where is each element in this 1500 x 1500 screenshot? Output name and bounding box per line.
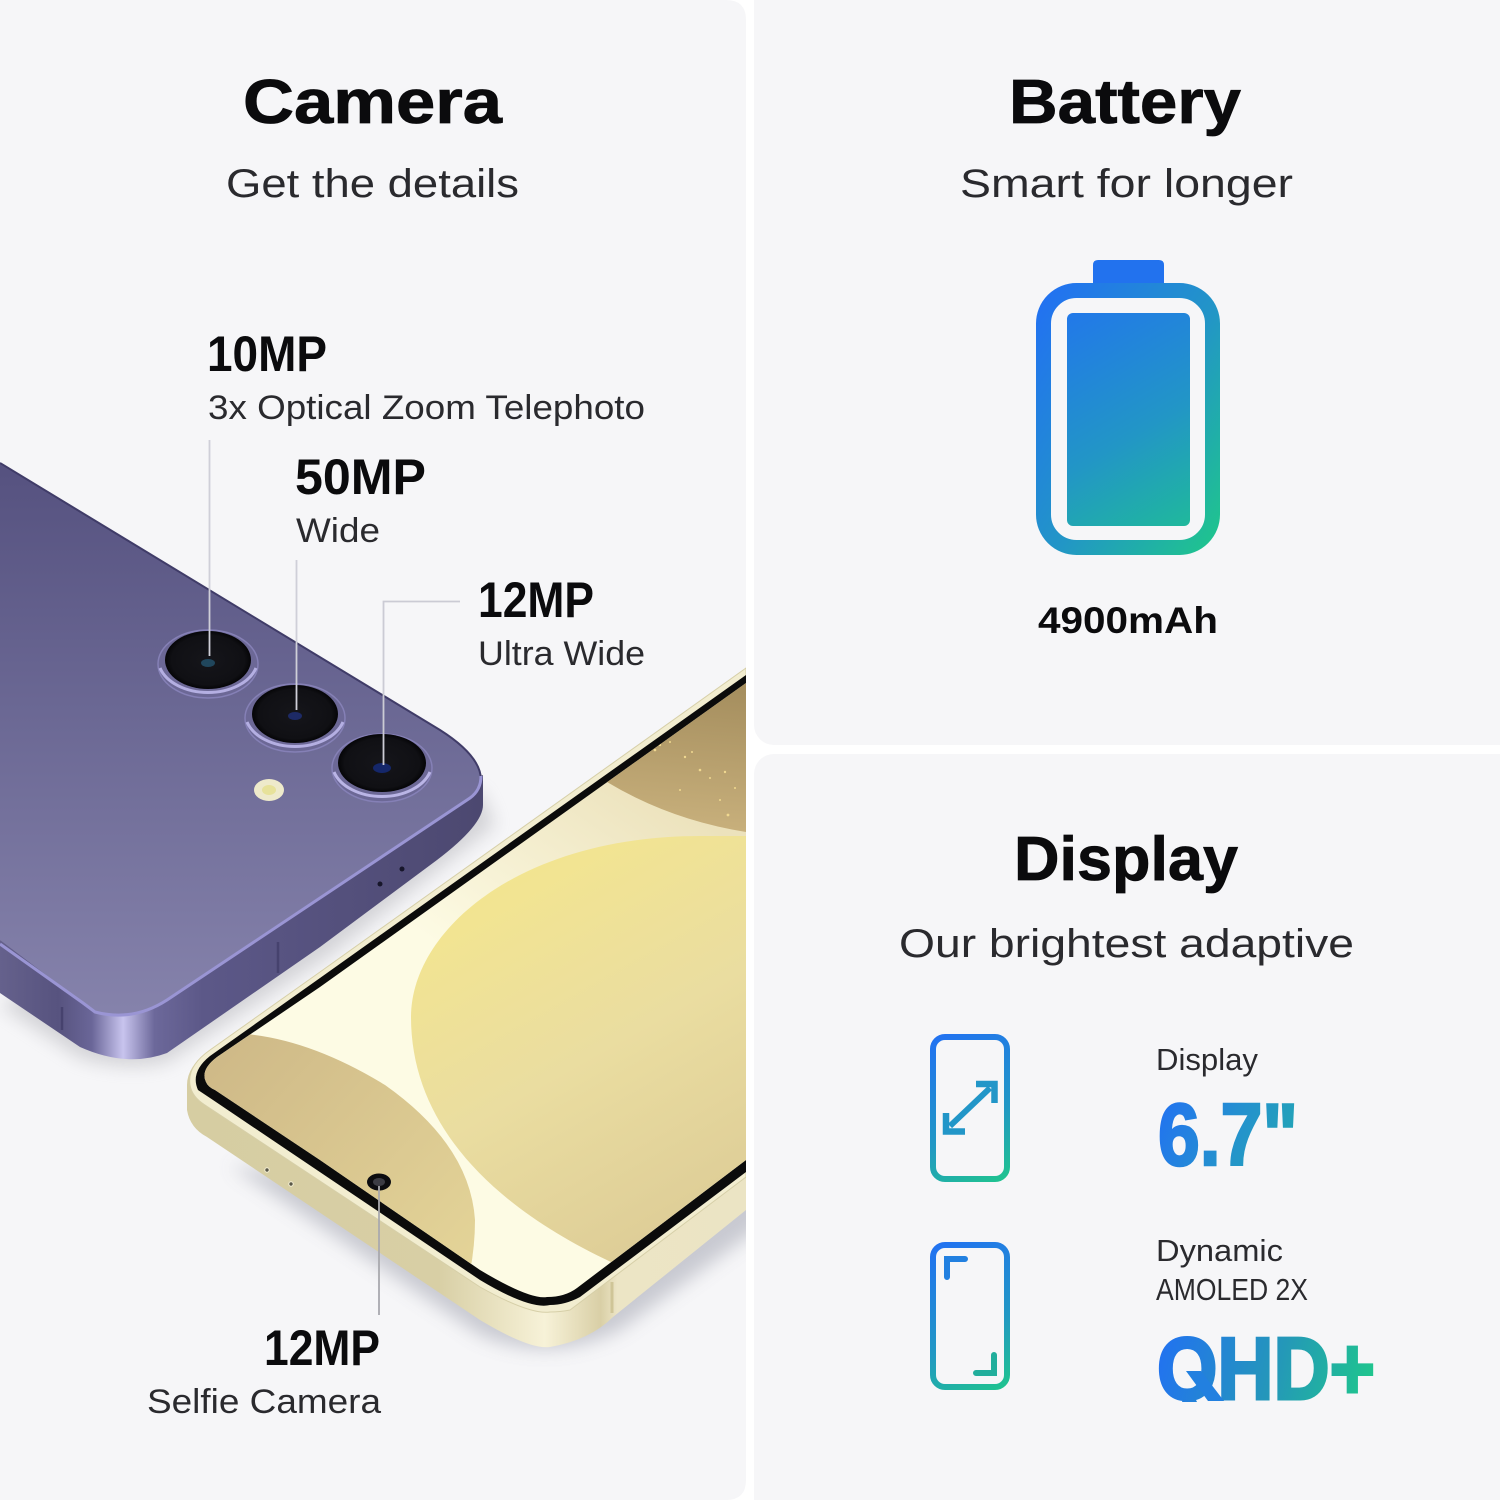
camera flash [254, 779, 284, 801]
earpiece holes [265, 1168, 293, 1186]
display subheading: Our brightest adaptive [899, 922, 1354, 966]
battery capacity: 4900mAh [1038, 600, 1218, 641]
label: 12MP selfie camera: 12MP [264, 1320, 380, 1376]
value: 6.7 inches: 6.7" [1158, 1085, 1298, 1184]
label: display size: Display [1156, 1042, 1258, 1077]
label: panel type: Dynamic [1156, 1233, 1283, 1268]
label: 12MP ultra wide [478, 572, 645, 673]
label: 12MP selfie camera: Selfie Camera [147, 1383, 381, 1421]
icon: phone with corner brackets [933, 1245, 1007, 1387]
label: 10MP telephoto: 10MP [207, 326, 327, 382]
label: 12MP ultra wide: Ultra Wide [478, 635, 645, 673]
icon: battery [1044, 260, 1212, 548]
callout line: 10MP [208, 440, 210, 656]
camera heading: Camera [243, 68, 503, 137]
label: 12MP ultra wide: 12MP [478, 572, 594, 628]
illustration: yellow phone front [180, 660, 770, 1349]
front camera [367, 1174, 391, 1190]
battery subheading: Smart for longer [960, 162, 1293, 206]
wallpaper: top tan shape [607, 683, 746, 832]
label: 50MP wide: Wide [296, 512, 380, 550]
label: panel type: AMOLED 2X [1156, 1272, 1308, 1307]
microphone holes [378, 866, 404, 886]
lens: 12MP ultra wide [332, 734, 432, 802]
lens: 50MP wide [245, 684, 345, 752]
display heading: Display [1014, 825, 1239, 894]
callout line: 12MP selfie [378, 1186, 380, 1315]
icon: phone with diagonal arrow [933, 1037, 1007, 1179]
panel: display [754, 754, 1500, 1500]
label: 10MP telephoto [207, 326, 645, 427]
callout line: 50MP [296, 560, 298, 710]
wallpaper: sparkles [654, 741, 736, 816]
label: 50MP wide: 50MP [295, 449, 426, 505]
lens: 10MP telephoto [158, 630, 258, 698]
label: 12MP selfie camera [147, 1320, 381, 1421]
value: QHD+ [1158, 1336, 1374, 1402]
label: 50MP wide [295, 449, 426, 550]
wallpaper: lower tan shape [204, 1034, 475, 1264]
panel: camera [0, 0, 746, 1500]
value: QHD+: QHD+ [1157, 1319, 1375, 1418]
illustration: purple phone back [0, 463, 495, 1066]
wallpaper: yellow circle [411, 836, 760, 1262]
label: panel type [1156, 1233, 1308, 1307]
panel: battery [754, 0, 1500, 745]
battery heading: Battery [1009, 68, 1242, 137]
camera subheading: Get the details [226, 162, 519, 206]
label: 10MP telephoto: 3x Optical Zoom Telephoto [208, 389, 645, 427]
callout line: 12MP ultra wide [384, 602, 460, 765]
